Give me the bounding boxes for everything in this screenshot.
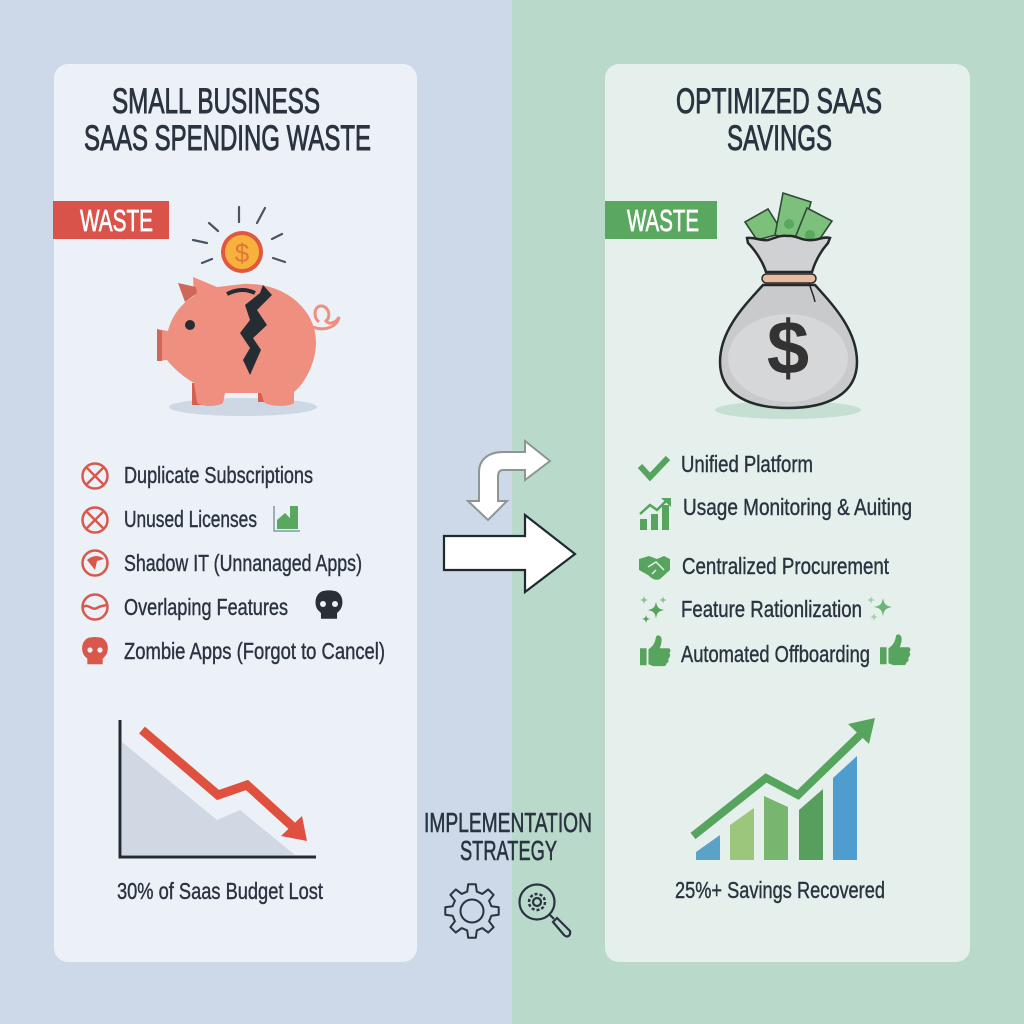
item: duplicate subscriptions bbox=[82, 462, 313, 488]
badge: red waste label: WASTE bbox=[80, 203, 153, 238]
background: right green half bbox=[512, 0, 1024, 1024]
heading: waste panel title bbox=[84, 82, 371, 158]
item: automated offboarding: Automated Offboarding bbox=[681, 641, 870, 667]
item: unused licenses: Unused Licenses bbox=[124, 506, 257, 532]
icon: cracked piggy bank with coin: $ bbox=[235, 238, 250, 268]
arrow: small curved two-way arrow bbox=[468, 441, 550, 520]
heading: waste panel title: SMALL BUSINESS bbox=[112, 82, 320, 121]
icon: money bag with cash: $ bbox=[767, 306, 809, 391]
item: unified platform: Unified Platform bbox=[681, 451, 813, 477]
list: savings actions bbox=[639, 451, 912, 667]
panel: savings bbox=[605, 64, 970, 962]
arrow: large transition arrow bbox=[444, 515, 575, 592]
badge: green waste label bbox=[605, 201, 717, 239]
item: shadow it bbox=[82, 550, 362, 576]
heading: implementation strategy: IMPLEMENTATION bbox=[424, 807, 592, 838]
caption: budget lost: 30% of Saas Budget Lost bbox=[117, 878, 323, 904]
item: shadow it: Shadow IT (Unnanaged Apps) bbox=[124, 550, 362, 576]
item: zombie apps: Zombie Apps (Forgot to Cancel) bbox=[124, 638, 385, 664]
icon: cracked piggy bank with coin bbox=[157, 207, 339, 416]
badge: red waste label bbox=[53, 201, 169, 239]
background: left blue half bbox=[0, 0, 512, 1024]
icon: magnifier with gear bbox=[520, 884, 570, 936]
item: duplicate subscriptions: Duplicate Subscriptions bbox=[124, 462, 313, 488]
badge: green waste label: WASTE bbox=[627, 203, 699, 238]
item: centralized procurement bbox=[639, 553, 889, 580]
icon: money bag with cash bbox=[715, 193, 861, 419]
item: centralized procurement: Centralized Procurement bbox=[682, 553, 889, 579]
list: waste causes bbox=[82, 462, 385, 664]
chart: declining spend bbox=[120, 720, 316, 857]
heading: waste panel title: SAAS SPENDING WASTE bbox=[84, 119, 371, 158]
item: usage monitoring bbox=[640, 494, 912, 530]
heading: savings panel title bbox=[676, 82, 882, 158]
item: usage monitoring: Usage Monitoring & Auiting bbox=[683, 494, 912, 520]
heading: implementation strategy: STRATEGY bbox=[460, 835, 557, 866]
heading: savings panel title: OPTIMIZED SAAS bbox=[676, 82, 882, 121]
caption: savings recovered: 25%+ Savings Recovered bbox=[675, 877, 885, 903]
heading: implementation strategy bbox=[424, 807, 592, 866]
item: feature rationalization: Feature Rationlization bbox=[681, 596, 862, 622]
heading: savings panel title: SAVINGS bbox=[727, 119, 832, 158]
item: unified platform bbox=[640, 451, 813, 477]
panel: waste bbox=[54, 64, 417, 962]
item: zombie apps bbox=[82, 637, 385, 664]
icon: gear bbox=[445, 884, 499, 938]
chart: rising savings bbox=[693, 718, 875, 860]
item: automated offboarding bbox=[640, 634, 910, 667]
item: overlapping features: Overlaping Features bbox=[124, 594, 288, 620]
